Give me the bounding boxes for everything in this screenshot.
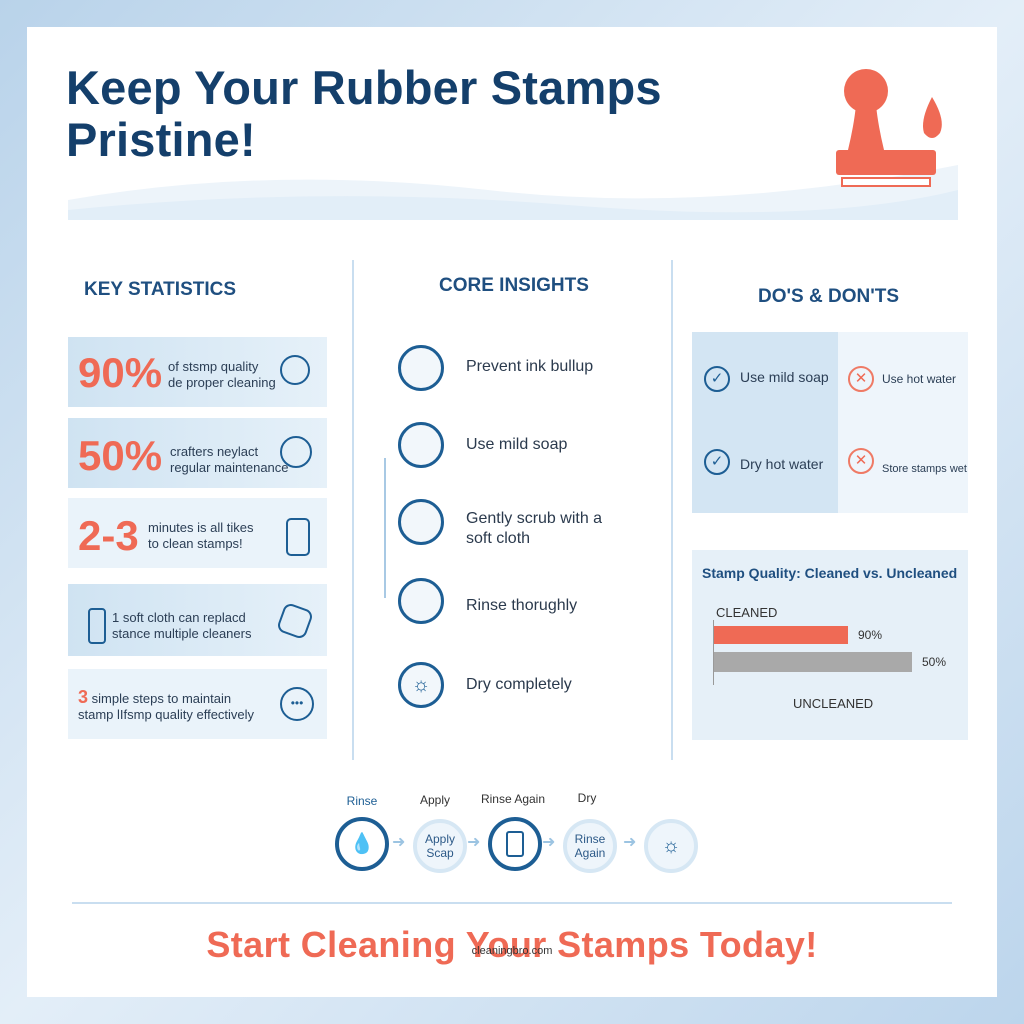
panel: dos and donts: ✓ — [711, 370, 723, 387]
stat 3 steps: ••• — [291, 696, 303, 710]
stat 90%: of stsmp quality — [168, 359, 258, 374]
bar chart: Stamp Quality: Cleaned vs. Uncleaned — [702, 565, 957, 581]
heading: key statistics: KEY STATISTICS — [84, 279, 236, 300]
stat soft cloth: stance multiple cleaners — [112, 626, 251, 641]
insight texts: Use mild soap — [466, 436, 567, 453]
panel: dos and donts: Use hot water — [882, 372, 956, 386]
panel: dos and donts: ✓ — [711, 453, 723, 470]
icon: stamp — [836, 69, 942, 187]
watermark: cleaningbro.com — [472, 945, 552, 957]
process flow: ☼ — [662, 835, 680, 857]
process flow: Apply — [425, 832, 455, 846]
insight texts: Rinse thorughly — [466, 597, 577, 614]
heading: dos and donts: DO'S & DON'TS — [758, 286, 899, 307]
panel: dos and donts: ✕ — [855, 370, 867, 387]
process flow: Again — [575, 846, 605, 860]
panel: core insights — [384, 345, 444, 708]
title: Pristine! — [66, 113, 256, 166]
heading: core insights: CORE INSIGHTS — [439, 275, 589, 296]
stat 2-3: to clean stamps! — [148, 536, 243, 551]
bar chart: UNCLEANED — [793, 696, 873, 711]
process flow — [335, 791, 698, 873]
panel: dos and donts — [692, 332, 968, 513]
insight texts: Prevent ink bullup — [466, 358, 593, 375]
process flow: ➜ — [392, 834, 405, 851]
process flow: Apply — [420, 793, 450, 807]
bar chart — [692, 550, 968, 740]
bar chart: 90% — [858, 628, 882, 642]
wave decoration — [68, 165, 958, 220]
process flow: Rinse — [575, 832, 605, 846]
stat 90%: 90% — [78, 349, 162, 396]
stat 50%: regular maintenance — [170, 460, 289, 475]
stat 50%: 50% — [78, 432, 162, 479]
insight texts: Gently scrub with a — [466, 510, 602, 527]
stat soft cloth — [68, 584, 327, 656]
process flow: Scap — [426, 846, 454, 860]
bar chart: 50% — [922, 655, 946, 669]
panel: dos and donts: Use mild soap — [740, 369, 829, 385]
insight texts: soft cloth — [466, 530, 530, 547]
panel: dos and donts: Dry hot water — [740, 456, 823, 472]
panel: key statistics — [68, 337, 327, 739]
stat 50%: crafters neylact — [170, 444, 258, 459]
process flow: Dry — [578, 791, 596, 805]
title: Keep Your Rubber Stamps — [66, 61, 662, 114]
bar chart: CLEANED — [716, 605, 777, 620]
process flow: 💧 — [350, 833, 374, 855]
panel: core insights: ☼ — [412, 674, 430, 696]
stat 2-3: 2-3 — [78, 512, 139, 559]
insight texts: Dry completely — [466, 676, 572, 693]
title — [66, 61, 662, 166]
process flow: ➜ — [623, 834, 636, 851]
stat 2-3: minutes is all tikes — [148, 520, 253, 535]
panel: dos and donts: Store stamps wet — [882, 463, 967, 475]
process flow: ➜ — [542, 834, 555, 851]
stat 3 steps: stamp lIfsmp quality effectively — [78, 707, 254, 722]
stat soft cloth: 1 soft cloth can replacd — [112, 610, 246, 625]
insight texts — [466, 358, 602, 693]
stat 3 steps: 3 simple steps to maintain — [78, 687, 231, 707]
stat 2-3 — [68, 498, 327, 568]
process flow: Rinse — [347, 794, 377, 808]
stat 90%: de proper cleaning — [168, 375, 276, 390]
panel: dos and donts: ✕ — [855, 452, 867, 469]
stat 90% — [68, 337, 327, 407]
stat 3 steps — [68, 669, 327, 739]
process flow: Rinse Again — [481, 792, 545, 806]
footer call to action: Start Cleaning Your Stamps Today! — [206, 924, 818, 965]
stat 50% — [68, 418, 327, 488]
process flow: ➜ — [467, 834, 480, 851]
